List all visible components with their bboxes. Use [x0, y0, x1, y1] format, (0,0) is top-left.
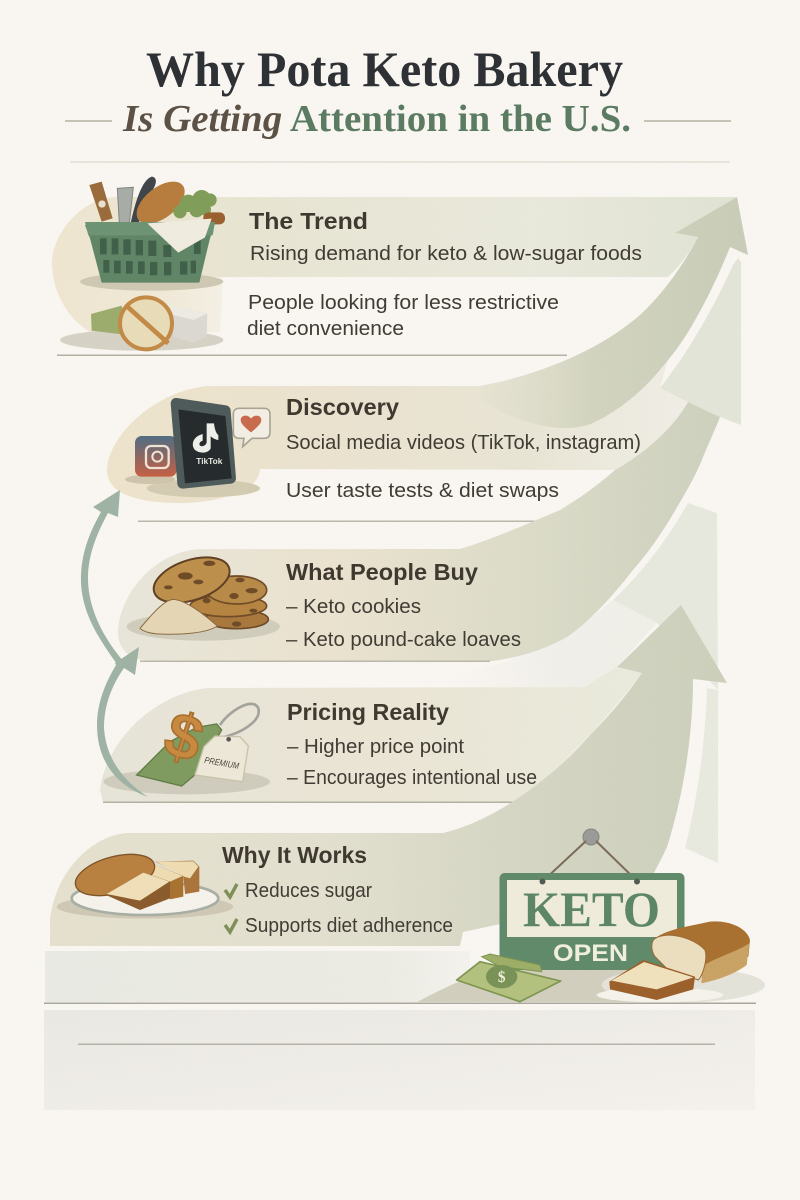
ground under sign [417, 966, 690, 1002]
heading: the trend: The Trend [249, 208, 368, 234]
arrow: pale highlight strip [450, 600, 657, 687]
icon: grocery basket [60, 173, 225, 351]
text: supports diet adherence: Supports diet adherence [245, 914, 453, 937]
arrow: faint head behind discovery [660, 258, 741, 425]
icon: check mark two [225, 919, 237, 932]
heading: what people buy: What People Buy [286, 559, 478, 585]
icon: cash stack [457, 954, 561, 1002]
arrow: pricing to buying connector [97, 647, 148, 797]
text: rising demand: Rising demand for keto & low-sugar foods [250, 242, 642, 265]
text: people looking: People looking for less restrictive [248, 291, 559, 314]
text: diet convenience: diet convenience [247, 317, 404, 340]
arrow: faint head behind what people buy [613, 503, 718, 690]
text: encourages intentional use: – Encourages intentional use [287, 766, 537, 789]
icon: cash stack: $ [498, 969, 506, 986]
text: keto pound-cake loaves: – Keto pound-cake loaves [286, 628, 521, 651]
icon: sliced bread on plate [57, 847, 233, 919]
icon: money and premium tag: $ [156, 699, 211, 776]
icon: keto open sign [500, 829, 684, 970]
empty bottom panel [44, 1010, 755, 1110]
panel: discovery [107, 197, 748, 522]
sign word keto: KETO [523, 881, 660, 937]
icon: keto cookies and flour [127, 549, 280, 641]
title line one: Why Pota Keto Bakery [146, 41, 623, 97]
arrow: trend growth arrow [480, 197, 748, 428]
text: keto cookies: – Keto cookies [286, 595, 421, 618]
panel: the trend [52, 173, 737, 356]
icon: money and premium tag: PREMIUM [204, 755, 240, 771]
title line two: Is Getting Attention in the U.S. [122, 98, 631, 140]
icon: check mark one [225, 884, 237, 897]
text: social media videos: Social media videos (TikTok, instagram) [286, 431, 641, 454]
text: higher price point: – Higher price point [287, 735, 464, 758]
arrow: faint lower right sliver [685, 688, 718, 863]
icon: loaf and slice on plate [597, 921, 765, 1002]
arrow: discovery to trend connector [81, 490, 124, 664]
text: reduces sugar: Reduces sugar [245, 879, 372, 902]
panel: pricing reality [100, 667, 642, 803]
heading: why it works: Why It Works [222, 842, 367, 868]
lower strip panel [45, 951, 470, 1002]
heading: discovery: Discovery [286, 394, 399, 420]
panel: what people buy [118, 402, 720, 662]
title [65, 41, 731, 163]
heading: pricing reality: Pricing Reality [287, 699, 449, 725]
icon: phone with social apps [125, 403, 270, 497]
sign word open: OPEN [553, 940, 628, 967]
icon: money and premium tag [103, 699, 270, 794]
text: user taste tests: User taste tests & diet swaps [286, 479, 559, 502]
icon: phone with social apps: TikTok [196, 456, 223, 466]
divider rule under bottom band [44, 1002, 756, 1004]
panel: why it works [50, 605, 727, 946]
